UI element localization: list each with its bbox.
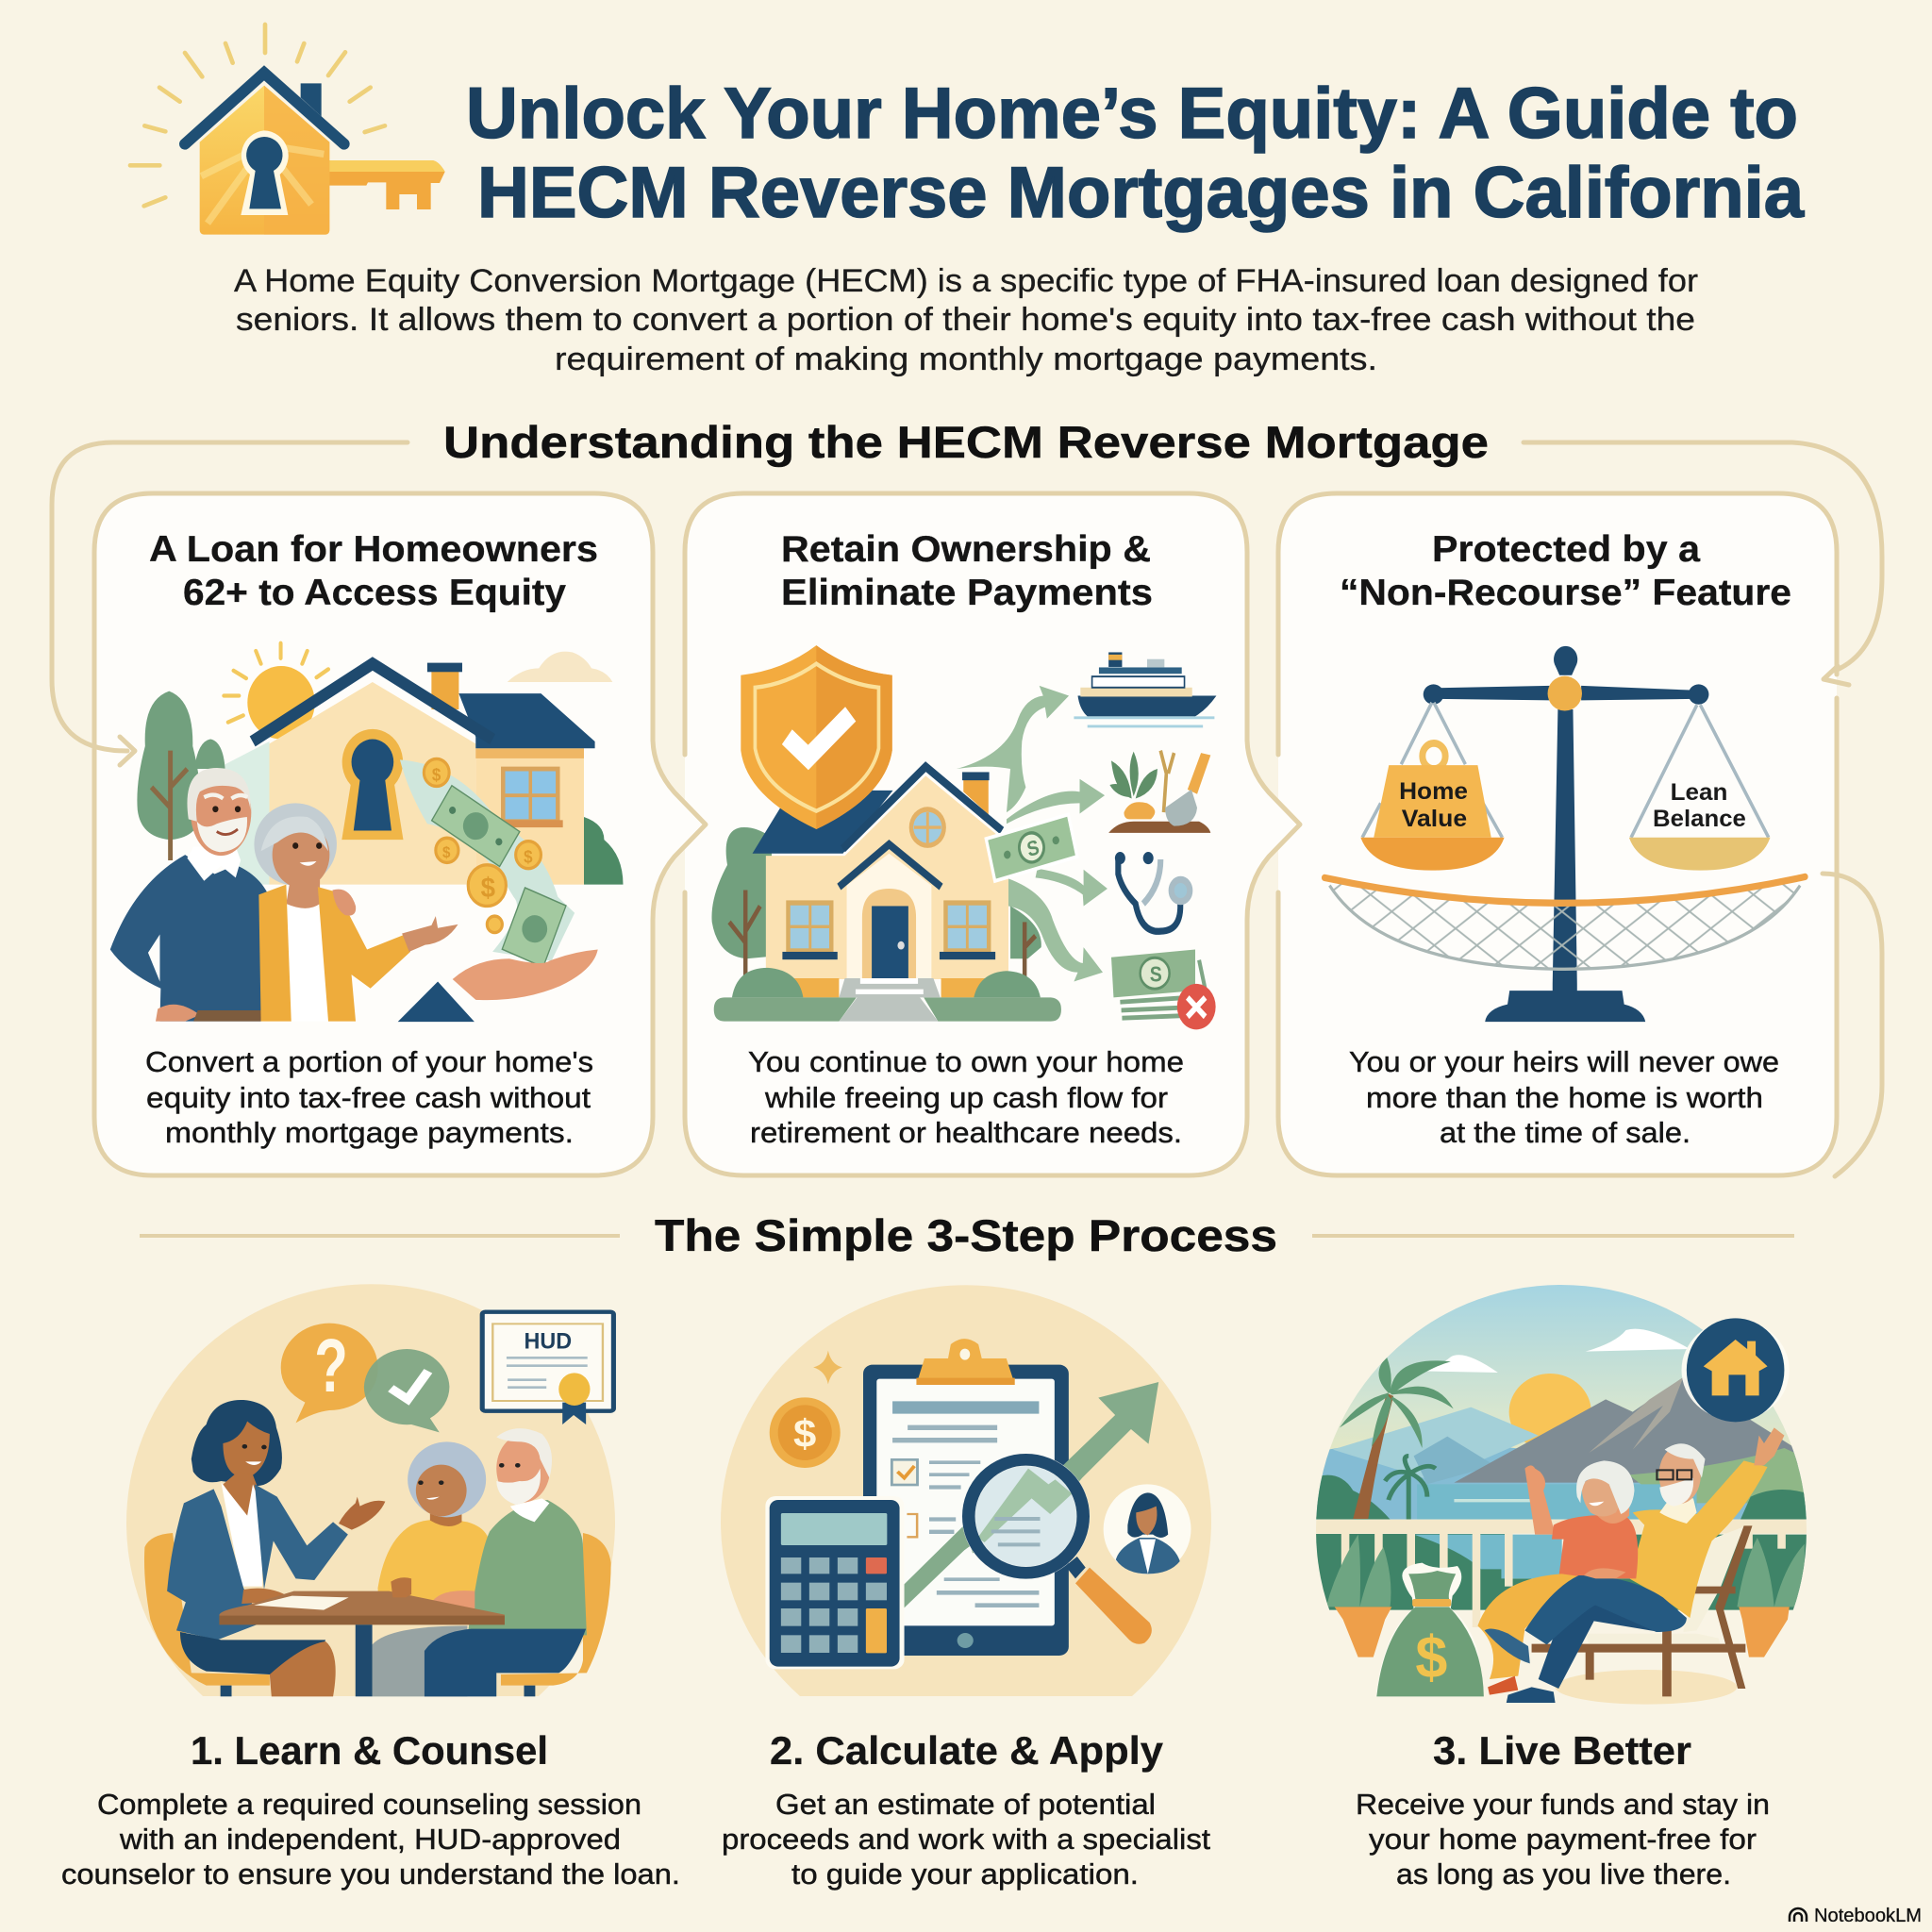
footer: NotebookLM mark: NotebookLM	[1814, 1906, 1922, 1926]
intro paragraph: A Home Equity Conversion Mortgage (HECM) is a specific type of FHA-insured loan designed for	[234, 263, 1698, 299]
chair frame	[1532, 1525, 1752, 1696]
icon: garden tools	[1108, 751, 1210, 833]
lower garden	[1312, 1534, 1807, 1610]
house badge	[1681, 1318, 1790, 1422]
right pan	[1629, 705, 1770, 871]
cash flow arrows	[957, 686, 1108, 981]
icon: stethoscope	[1118, 856, 1190, 931]
chair back and seat	[1586, 1526, 1744, 1644]
step heading: 3. Live Better	[1433, 1728, 1691, 1773]
scale post and base	[1424, 646, 1708, 1022]
calculator	[765, 1496, 905, 1669]
seated couple and chair	[1477, 1427, 1784, 1703]
safety net	[1322, 874, 1808, 974]
card heading	[149, 529, 598, 613]
card heading: “Non-Recourse” Feature	[1340, 573, 1791, 613]
left pan with weight	[1360, 703, 1505, 871]
potted plants	[1326, 1535, 1805, 1607]
card text: at the time of sale.	[1440, 1116, 1690, 1149]
panel: loan for homeowners	[94, 493, 706, 1175]
icon: light rays	[130, 25, 385, 206]
money bag	[1376, 1563, 1484, 1696]
step text: Receive your funds and stay in	[1356, 1788, 1770, 1821]
left pan with weight: Value	[1402, 806, 1467, 832]
cash stream: $	[524, 847, 533, 867]
certificate: HUD	[525, 1327, 572, 1354]
step text: with an independent, HUD-approved	[119, 1823, 621, 1856]
card heading	[781, 529, 1153, 613]
card text: Convert a portion of your home's	[145, 1045, 593, 1078]
icon: keyhole	[241, 130, 289, 215]
cash stream: $	[481, 873, 495, 904]
magnifying glass	[962, 1454, 1152, 1644]
cash stream	[400, 758, 575, 967]
intro paragraph: requirement of making monthly mortgage payments.	[555, 341, 1377, 377]
right pan: Lean	[1671, 779, 1727, 806]
card text	[748, 1045, 1184, 1149]
shield	[741, 645, 892, 829]
step text: as long as you live there.	[1396, 1857, 1731, 1890]
roof and chimney	[963, 779, 989, 815]
step 2: calculate and apply	[721, 1285, 1211, 1890]
illustration: counseling session: ?	[314, 1324, 348, 1407]
woman head	[1597, 1507, 1629, 1524]
bill	[986, 814, 1077, 881]
counselor	[167, 1400, 385, 1696]
step text	[1356, 1788, 1770, 1890]
card heading	[1340, 529, 1791, 613]
illustration: couple on balcony	[1312, 1283, 1815, 1705]
logo: house with keyhole and key	[130, 25, 445, 235]
card text	[145, 1045, 593, 1149]
icon: cash with red x: S	[1150, 962, 1162, 987]
card text	[1349, 1045, 1779, 1149]
left pan with weight: Home	[1399, 778, 1468, 805]
icon: key	[328, 160, 445, 209]
connector arrow: heading to first card	[52, 442, 408, 765]
step text: counselor to ensure you understand the loan.	[61, 1857, 680, 1890]
man	[110, 768, 274, 1022]
step text	[722, 1788, 1210, 1890]
illustration: house, shield and cash flow	[711, 645, 1216, 1029]
trees	[137, 691, 623, 885]
illustration: calculator and clipboard	[721, 1285, 1211, 1696]
step text: to guide your application.	[791, 1857, 1139, 1890]
background circle	[126, 1284, 615, 1696]
card heading: Protected by a	[1432, 529, 1700, 570]
man head	[1659, 1498, 1697, 1524]
cash stream: $	[432, 765, 441, 785]
coin	[770, 1397, 841, 1468]
trees	[711, 827, 1041, 958]
panel: retain ownership	[685, 493, 1300, 1175]
chairs	[144, 1533, 611, 1696]
speech bubbles	[281, 1324, 378, 1423]
illustration: counseling session	[126, 1284, 615, 1696]
background circle	[721, 1285, 1211, 1696]
connector line: third card lower right	[1823, 874, 1882, 1176]
card heading: Eliminate Payments	[781, 573, 1153, 613]
woman	[254, 803, 458, 1022]
card text: retirement or healthcare needs.	[750, 1116, 1182, 1149]
card text: You or your heirs will never owe	[1349, 1045, 1779, 1078]
step heading: 2. Calculate & Apply	[770, 1728, 1164, 1773]
giving hand	[398, 950, 598, 1022]
illustration: balance scale with safety net	[1322, 646, 1808, 1022]
sparkle	[813, 1351, 842, 1384]
house walls	[766, 775, 1008, 979]
step text: proceeds and work with a specialist	[722, 1823, 1210, 1856]
sun and cloud	[224, 643, 612, 740]
panel: non-recourse	[1278, 493, 1837, 1175]
growth arrow	[904, 1382, 1158, 1608]
windows and door	[909, 807, 946, 848]
icon: roof and chimney	[301, 83, 322, 116]
step text: Get an estimate of potential	[775, 1788, 1156, 1821]
icon: cash with red x	[1111, 950, 1216, 1029]
woman body	[1524, 1465, 1556, 1535]
section heading: process: The Simple 3-Step Process	[655, 1210, 1277, 1260]
section heading: understanding: Understanding the HECM Reverse Mortgage	[443, 417, 1489, 467]
railing	[1312, 1520, 1811, 1627]
icon: house body	[200, 86, 329, 235]
coin: $	[793, 1412, 816, 1457]
man legs	[1539, 1602, 1659, 1689]
connector arrow: heading to third card	[1524, 442, 1882, 685]
title	[466, 74, 1805, 233]
man torso	[1629, 1460, 1768, 1618]
scenery circle	[1312, 1283, 1815, 1657]
table	[219, 1577, 505, 1696]
keyhole	[341, 729, 403, 840]
step heading: 1. Learn & Counsel	[191, 1728, 548, 1773]
specialist avatar	[1104, 1484, 1191, 1574]
card text: while freeing up cash flow for	[764, 1081, 1168, 1114]
icon: cruise ship	[1074, 652, 1216, 726]
intro paragraph: seniors. It allows them to convert a portion of their home's equity into tax-free cash without the	[236, 302, 1695, 338]
title: Unlock Your Home’s Equity: A Guide to	[466, 74, 1798, 154]
card text: You continue to own your home	[748, 1045, 1184, 1078]
step text: your home payment-free for	[1369, 1823, 1757, 1856]
bill: S	[1025, 836, 1041, 862]
cash stream: $	[442, 845, 451, 861]
intro paragraph	[234, 263, 1698, 377]
card text: more than the home is worth	[1366, 1081, 1763, 1114]
card text: monthly mortgage payments.	[165, 1116, 574, 1149]
step text: Complete a required counseling session	[97, 1788, 641, 1821]
card heading: Retain Ownership &	[781, 529, 1151, 570]
step 3: live better	[1312, 1283, 1815, 1890]
step text	[61, 1788, 680, 1890]
ground, bushes, walkway	[732, 968, 1041, 997]
illustration: couple, house and cash stream	[110, 643, 623, 1022]
certificate	[482, 1312, 613, 1424]
house	[225, 663, 595, 885]
card text: equity into tax-free cash without	[146, 1081, 591, 1114]
card heading: A Loan for Homeowners	[149, 529, 598, 570]
floor shadow	[1556, 1670, 1737, 1705]
right pan: Belance	[1653, 806, 1746, 832]
card heading: 62+ to Access Equity	[183, 573, 566, 613]
step 1: learn and counsel	[61, 1284, 680, 1890]
money bag: $	[1415, 1624, 1447, 1690]
seated couple	[373, 1428, 587, 1696]
title: HECM Reverse Mortgages in California	[477, 153, 1805, 233]
clipboard tablet	[863, 1339, 1069, 1656]
